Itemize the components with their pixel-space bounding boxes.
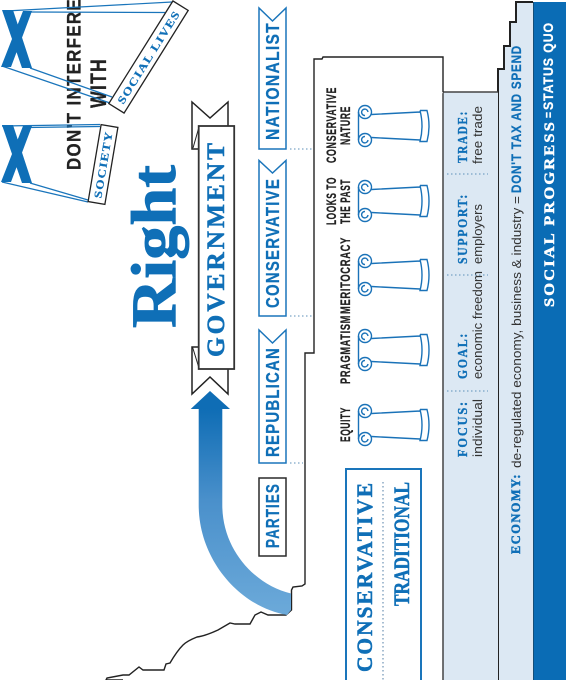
tag: nationalist xyxy=(259,8,286,149)
column label: looks to the past: LOOKS TO xyxy=(323,177,339,225)
tag: conservative: CONSERVATIVE xyxy=(262,178,283,308)
icon: column looks to the past xyxy=(358,180,429,222)
text: economy xyxy=(508,45,524,554)
panel: economy band xyxy=(498,2,533,680)
column label: looks to the past xyxy=(323,177,353,225)
text: focus: FOCUS: xyxy=(455,400,470,457)
text: social progress equals status quo: SOCIAL PROGRESS xyxy=(542,120,558,307)
icon: column equity xyxy=(358,404,429,446)
icon: column meritocracy xyxy=(358,254,429,296)
panel: building outline and coastline xyxy=(106,57,443,680)
column label: conservative nature xyxy=(323,87,353,163)
text: focus xyxy=(455,399,485,457)
tag: society xyxy=(88,125,118,204)
heading: Right: Right xyxy=(118,164,189,328)
icon: X with strings to society xyxy=(1,124,100,202)
tag: conservative xyxy=(259,160,286,316)
column label: meritocracy: MERITOCRACY xyxy=(337,237,353,314)
banner: government: GOVERNMENT xyxy=(203,140,230,357)
tag: social lives xyxy=(109,1,188,113)
panel: conservative traditional box xyxy=(346,469,421,680)
text: goal xyxy=(455,271,485,379)
text: economy: de-regulated economy, business & industry = xyxy=(509,196,524,468)
text: social progress equals status quo: = xyxy=(541,112,556,118)
text: support: SUPPORT: xyxy=(455,193,470,264)
text: goal: economic freedom xyxy=(470,271,485,379)
text: social progress equals status quo xyxy=(541,22,558,307)
panel: focus goal support trade band xyxy=(443,92,498,680)
panel: social progress band xyxy=(533,2,566,680)
icon: X with strings to social lives xyxy=(1,2,172,103)
text: economy: ECONOMY: xyxy=(509,473,523,554)
tag: republican: REPUBLICAN xyxy=(262,347,283,457)
column label: equity: EQUITY xyxy=(337,407,353,442)
text: goal: GOAL: xyxy=(455,332,470,379)
icon: column conservative nature xyxy=(358,106,429,146)
text: support: employers xyxy=(470,204,485,264)
banner: government xyxy=(192,102,234,394)
column label: conservative nature: NATURE xyxy=(337,106,353,145)
text: trade: TRADE: xyxy=(455,110,470,163)
column label: looks to the past: THE PAST xyxy=(337,179,353,224)
icon: column pragmatism xyxy=(358,330,429,370)
text: focus: individual xyxy=(470,399,485,457)
arrow: gradient curved arrow to government xyxy=(191,391,291,615)
text: social progress equals status quo: STATUS QUO xyxy=(541,22,556,110)
column label: pragmatism: PRAGMATISM xyxy=(337,315,353,384)
text: trade xyxy=(455,106,485,164)
text: support xyxy=(455,193,485,264)
panel: conservative traditional box: TRADITIONAL xyxy=(389,482,414,606)
text: trade: free trade xyxy=(470,106,485,164)
panel: conservative traditional box: CONSERVATIVE xyxy=(352,481,377,672)
tag: parties: PARTIES xyxy=(262,483,283,548)
tag: society: SOCIETY xyxy=(92,130,116,199)
tag: parties xyxy=(259,478,286,556)
tag: nationalist: NATIONALIST xyxy=(262,22,283,140)
text: economy: DON'T TAX AND SPEND xyxy=(508,45,524,193)
column label: conservative nature: CONSERVATIVE xyxy=(323,87,339,163)
heading: don't interfere with xyxy=(64,0,111,170)
tag: social lives: SOCIAL LIVES xyxy=(116,9,183,107)
heading: don't interfere with: WITH xyxy=(86,58,111,108)
